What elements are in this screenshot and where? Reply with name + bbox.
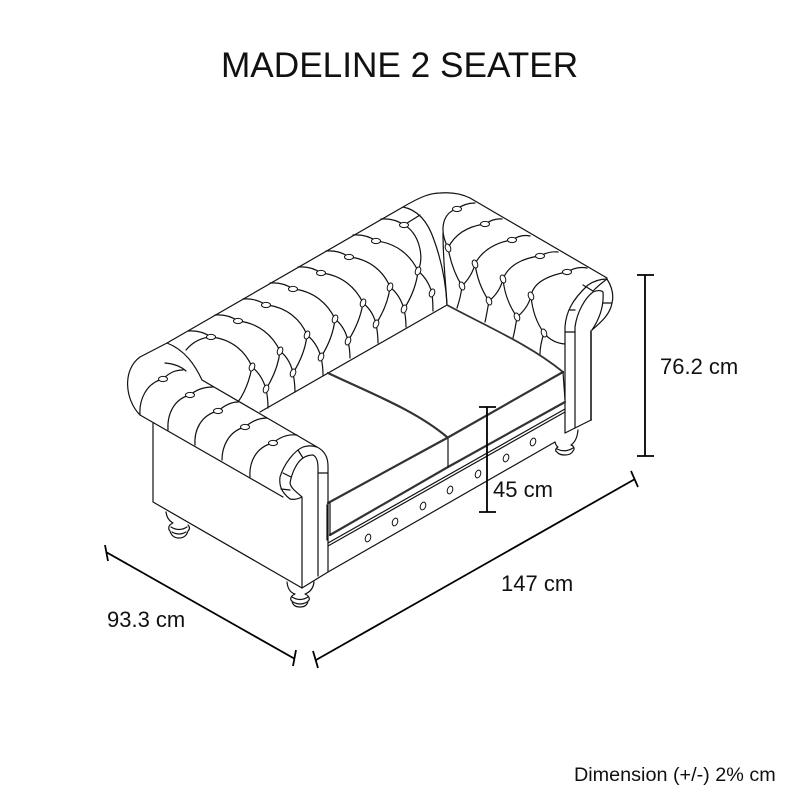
dimension: depth 93.3 cm: 93.3 cm (107, 607, 185, 632)
right arm buttons (444, 206, 572, 338)
sofa outline: back top edge (128, 193, 607, 415)
right arm front scroll (565, 279, 613, 433)
front rail with studs (328, 409, 565, 572)
title: MADELINE 2 SEATER (221, 46, 578, 85)
tolerance note: Dimension (+/-) 2% cm (574, 764, 776, 786)
dimension: width 147 cm: 147 cm (501, 571, 573, 596)
dimension: height 76.2 cm (637, 275, 738, 456)
right arm tufting (443, 203, 587, 354)
left arm top with tufts (140, 370, 317, 497)
back legs and front legs (166, 430, 578, 607)
sofa line drawing (128, 193, 613, 607)
dimension: depth 93.3 cm (105, 545, 296, 666)
seat cushions (260, 305, 565, 540)
dimension: seat height 45 cm (479, 407, 553, 512)
dimension: height 76.2 cm: 76.2 cm (660, 354, 738, 379)
dimension: width 147 cm (313, 471, 638, 668)
left arm front scroll (280, 446, 328, 588)
dimension: seat height 45 cm: 45 cm (493, 477, 553, 502)
back tufting curves (165, 207, 447, 408)
back tufting buttons (206, 222, 436, 394)
left arm side panel (153, 423, 302, 588)
